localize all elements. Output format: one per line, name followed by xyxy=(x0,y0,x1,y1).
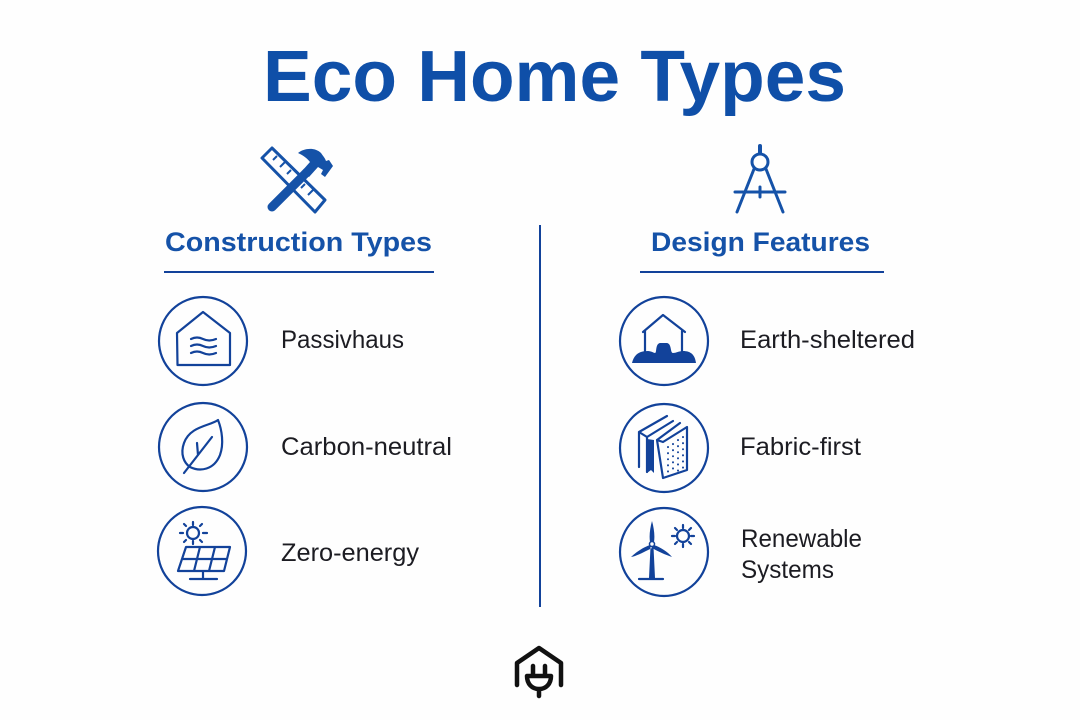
item: Fabric-first: Fabric-first xyxy=(740,433,861,461)
heading: Design Features: Design Features xyxy=(651,227,870,257)
icon: house with plug xyxy=(517,648,561,696)
item: Earth-sheltered: Earth-sheltered xyxy=(740,326,915,354)
item: Renewable Systems: Systems xyxy=(741,556,834,584)
item: Passivhaus: Passivhaus xyxy=(281,326,404,354)
item: Carbon-neutral xyxy=(159,403,452,491)
icon: drafting compass xyxy=(735,146,785,212)
item: Zero-energy: Zero-energy xyxy=(281,539,420,567)
item: Zero-energy xyxy=(158,507,420,595)
item: Renewable Systems: Renewable xyxy=(741,525,862,553)
item: Renewable Systems xyxy=(620,508,862,596)
title: Eco Home Types xyxy=(263,37,846,117)
item: Earth-sheltered xyxy=(620,297,915,385)
item: Carbon-neutral: Carbon-neutral xyxy=(281,433,452,461)
item: Fabric-first xyxy=(620,404,861,492)
heading: Construction Types: Construction Types xyxy=(165,227,432,257)
icon: ruler and hammer xyxy=(262,148,333,212)
item: Passivhaus xyxy=(159,297,404,385)
